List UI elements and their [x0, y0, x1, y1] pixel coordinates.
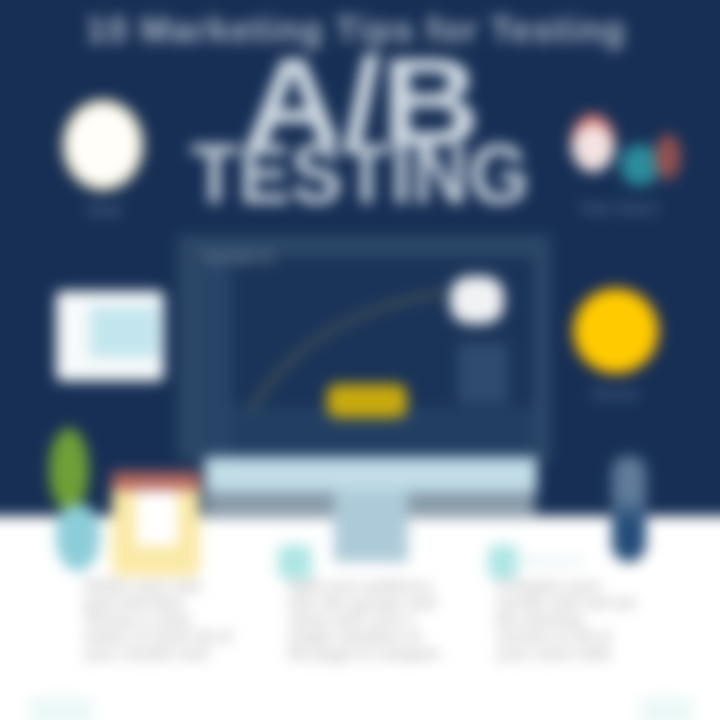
icon: colored people group — [560, 104, 690, 194]
text: column 3 heading: Measure — [524, 553, 585, 570]
footer mark: left — [30, 697, 92, 720]
icon: column 2 badge — [278, 545, 312, 579]
icon: yellow sun — [576, 291, 656, 371]
icon: green leaf — [49, 428, 89, 512]
icon: teal drop — [56, 505, 100, 571]
icon: navy bottle — [612, 456, 646, 562]
icon: envelope with badge — [112, 472, 200, 576]
icon: teal person — [620, 144, 660, 186]
icon: cream circle — [66, 103, 140, 187]
panel: browser card — [56, 291, 164, 381]
title: 10 Marketing Tips for Testing — [86, 9, 626, 50]
button: yellow — [327, 384, 407, 418]
panel: right column — [458, 343, 508, 403]
icon: red top — [112, 472, 200, 490]
label: sun: Result — [592, 386, 638, 403]
panel: lower screen — [232, 407, 534, 462]
text: screen heading: Variant A — [200, 248, 274, 267]
icon: white sheet — [136, 490, 178, 546]
panel: monitor screen — [178, 235, 550, 460]
heading: A/B: A/B — [244, 33, 480, 172]
chart: rising curve — [248, 286, 444, 410]
icon: column 3 badge — [488, 545, 518, 579]
label: cream circle: Goal — [87, 202, 121, 219]
heading: testing: TESTING — [191, 127, 529, 221]
icon: dark red person — [655, 134, 681, 180]
panel: monitor stand — [334, 490, 408, 562]
callout: white bubble — [450, 276, 504, 324]
chart: card content — [90, 307, 160, 357]
panel: monitor base strip — [205, 494, 535, 518]
footer mark: right — [640, 697, 692, 720]
panel: left column — [196, 265, 232, 470]
icon: pink person — [571, 114, 615, 172]
panel: monitor bottom bezel — [205, 457, 537, 493]
panel: navy background — [0, 0, 720, 516]
label: people group: Your Users — [580, 200, 658, 217]
